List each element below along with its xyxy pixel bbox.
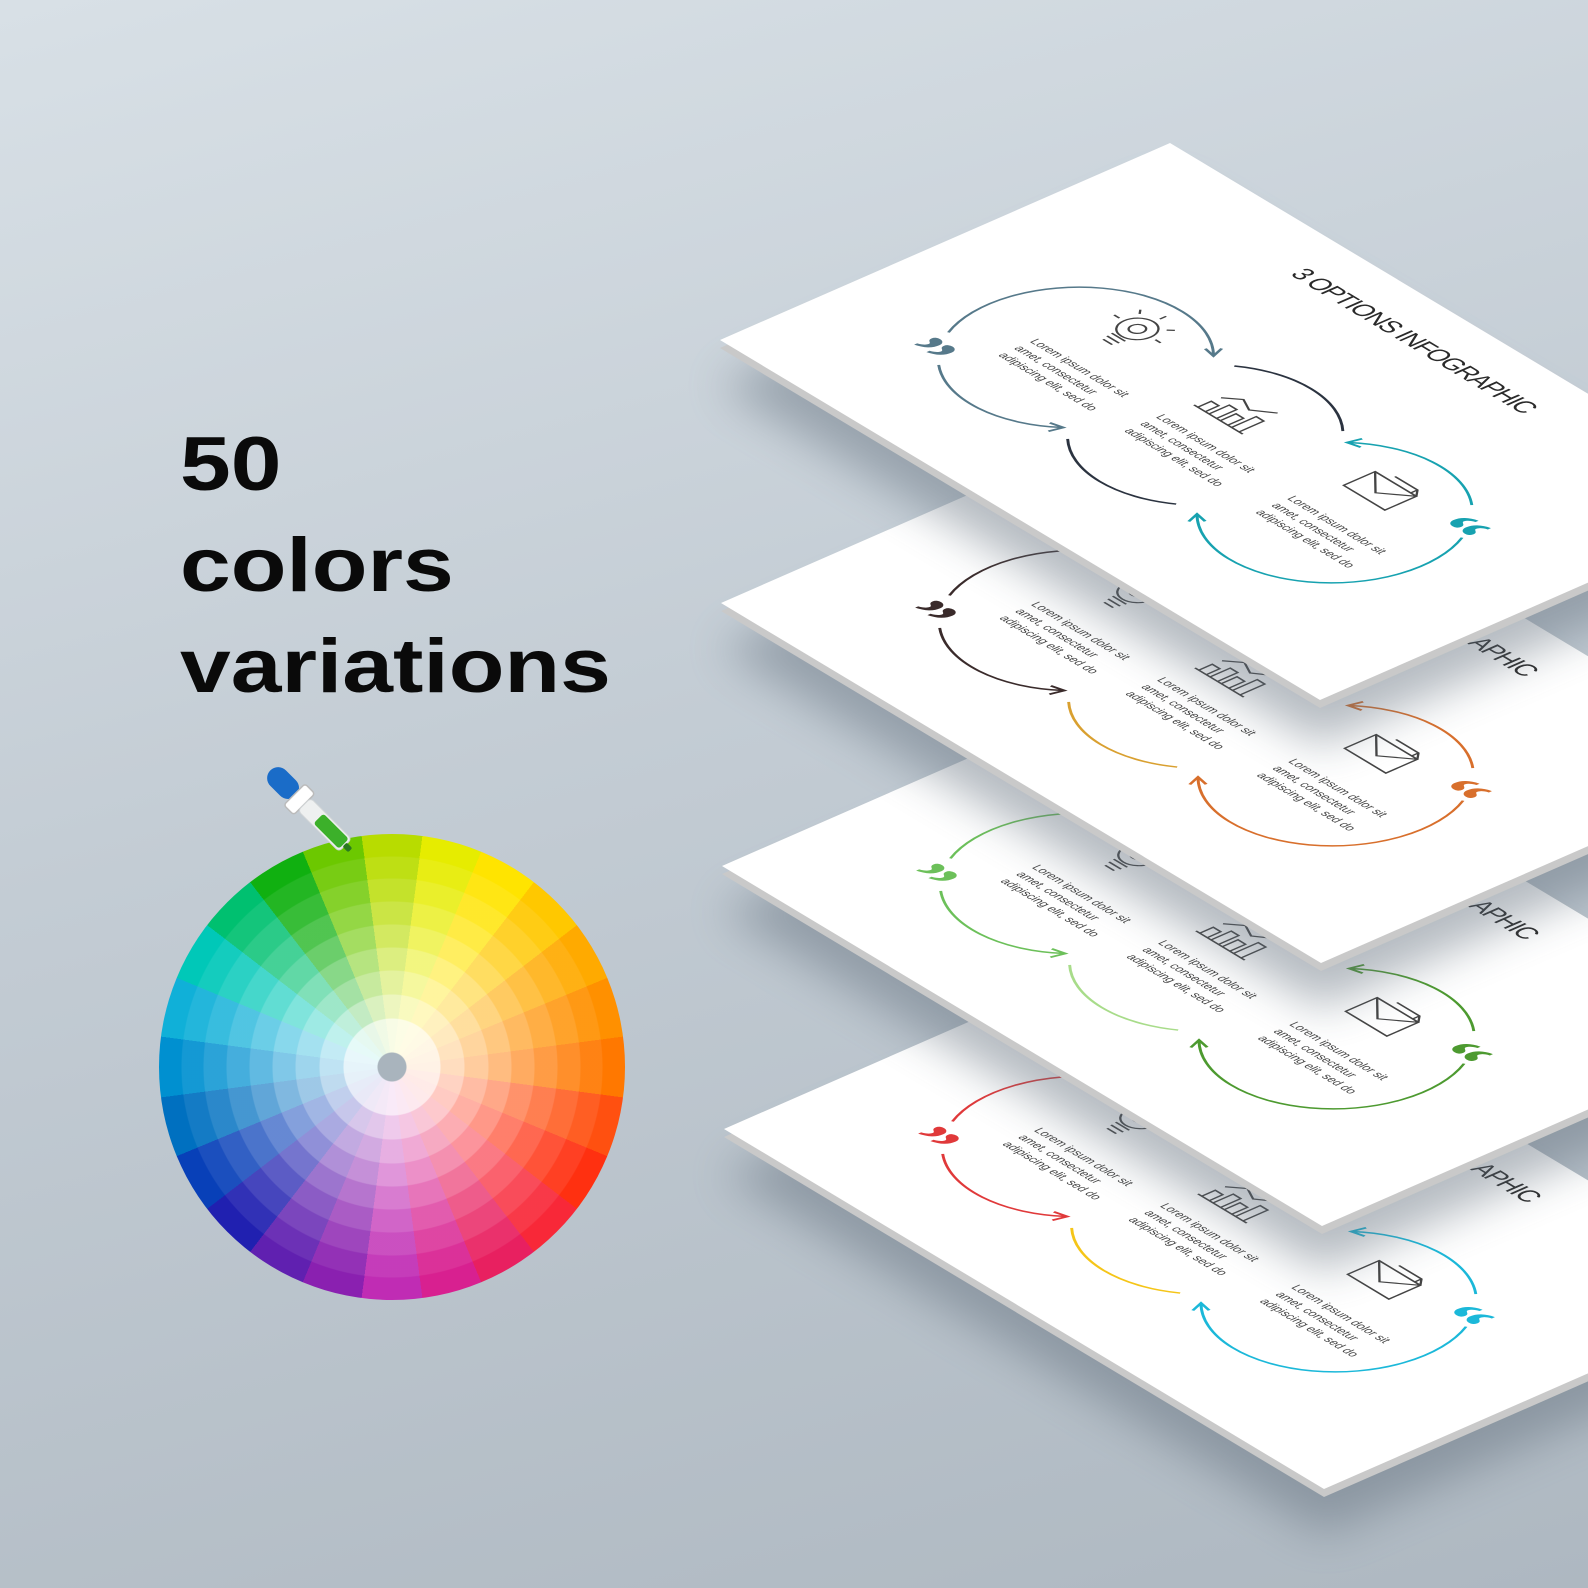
quote marks: “ <box>1404 506 1507 556</box>
color wheel <box>159 834 625 1300</box>
title: 50 colors variations: 50 <box>180 422 281 507</box>
slide 4: red yellow cyan: adipiscing elit, sed do <box>1256 1297 1363 1359</box>
slide 2: brown gold orange: Lorem ipsum dolor sit <box>1153 676 1261 738</box>
slide 4: red yellow cyan: adipiscing elit, sed do <box>999 1140 1106 1202</box>
slide 3: greens: amet, consectetur <box>1270 1027 1361 1079</box>
slide 4: red yellow cyan: Lorem ipsum dolor sit <box>1288 1283 1395 1345</box>
slide 2: brown gold orange: amet, consectetur <box>1138 682 1229 735</box>
text blocks: amet, consectetur <box>1137 419 1228 472</box>
slide 3: greens: Lorem ipsum dolor sit <box>1286 1020 1393 1082</box>
slide 3: greens: adipiscing elit, sed do <box>997 877 1104 939</box>
text blocks: Lorem ipsum dolor sit <box>1026 337 1134 399</box>
slide 2: brown gold orange: adipiscing elit, sed do <box>996 614 1103 676</box>
slide 3: greens: ” <box>874 854 977 904</box>
slide 1: blue-gray navy teal <box>720 143 1588 745</box>
text blocks: Lorem ipsum dolor sit <box>1284 494 1391 556</box>
slide 3: greens <box>722 669 1588 1271</box>
quote marks <box>872 269 1507 615</box>
slide 4: red yellow cyan: Lorem ipsum dolor sit <box>1030 1126 1138 1188</box>
slide 4: red yellow cyan: Lorem ipsum dolor sit <box>1156 1202 1264 1264</box>
text blocks: amet, consectetur <box>1011 344 1102 396</box>
slide 4: red yellow cyan: 3 OPTIONS INFOGRAPHIC <box>1288 1054 1549 1206</box>
slide 3: greens: 3 OPTIONS INFOGRAPHIC <box>1286 791 1547 943</box>
text blocks <box>992 337 1393 570</box>
slide 3: greens: adipiscing elit, sed do <box>1123 952 1230 1014</box>
slide 4: red yellow cyan: adipiscing elit, sed do <box>1125 1215 1232 1277</box>
slide 3: greens: adipiscing elit, sed do <box>1254 1034 1361 1096</box>
slide 3: greens: Lorem ipsum dolor sit <box>1028 863 1136 925</box>
slide 2: brown gold orange: ” <box>873 591 976 641</box>
slide 4: red yellow cyan: amet, consectetur <box>1272 1290 1363 1342</box>
slide 2: brown gold orange: “ <box>1405 769 1508 819</box>
title: 50 colors variations <box>180 422 611 709</box>
slide 4: red yellow cyan: “ <box>1408 1295 1511 1345</box>
slide 3: greens: “ <box>1406 1032 1509 1082</box>
slide 2: brown gold orange: amet, consectetur <box>1012 607 1103 659</box>
slide 4: red yellow cyan: amet, consectetur <box>1015 1133 1106 1185</box>
slide 4: red yellow cyan: amet, consectetur <box>1141 1208 1232 1261</box>
text blocks: adipiscing elit, sed do <box>995 351 1102 413</box>
text blocks: amet, consectetur <box>1268 501 1359 553</box>
slide 2: brown gold orange: Lorem ipsum dolor sit <box>1285 757 1392 819</box>
slide 2: brown gold orange: adipiscing elit, sed do <box>1253 771 1360 833</box>
slide 3: greens: amet, consectetur <box>1139 945 1230 998</box>
text blocks: adipiscing elit, sed do <box>1252 508 1359 570</box>
slide 2: brown gold orange: Lorem ipsum dolor sit <box>1027 600 1135 662</box>
slide 4: red yellow cyan: ” <box>876 1117 979 1167</box>
slide 2: brown gold orange: adipiscing elit, sed do <box>1122 689 1229 751</box>
title: 50 colors variations: variations <box>180 624 611 709</box>
slide 2: brown gold orange: 3 OPTIONS INFOGRAPHIC <box>1285 528 1546 680</box>
slide 4: red yellow cyan <box>724 932 1588 1534</box>
text blocks: adipiscing elit, sed do <box>1121 426 1228 488</box>
cycle arrows <box>882 258 1528 612</box>
title: 50 colors variations: colors <box>180 523 454 608</box>
icons: lightbulb, chart, envelope <box>1074 302 1445 514</box>
text blocks: Lorem ipsum dolor sit <box>1152 413 1260 475</box>
slide title: 3 OPTIONS INFOGRAPHIC <box>1284 265 1545 417</box>
quote marks: ” <box>872 328 975 378</box>
slide 2: brown gold orange <box>721 406 1588 1008</box>
slide 3: greens: Lorem ipsum dolor sit <box>1154 939 1262 1001</box>
slide 3: greens: amet, consectetur <box>1013 870 1104 922</box>
slide 2: brown gold orange: amet, consectetur <box>1269 764 1360 816</box>
